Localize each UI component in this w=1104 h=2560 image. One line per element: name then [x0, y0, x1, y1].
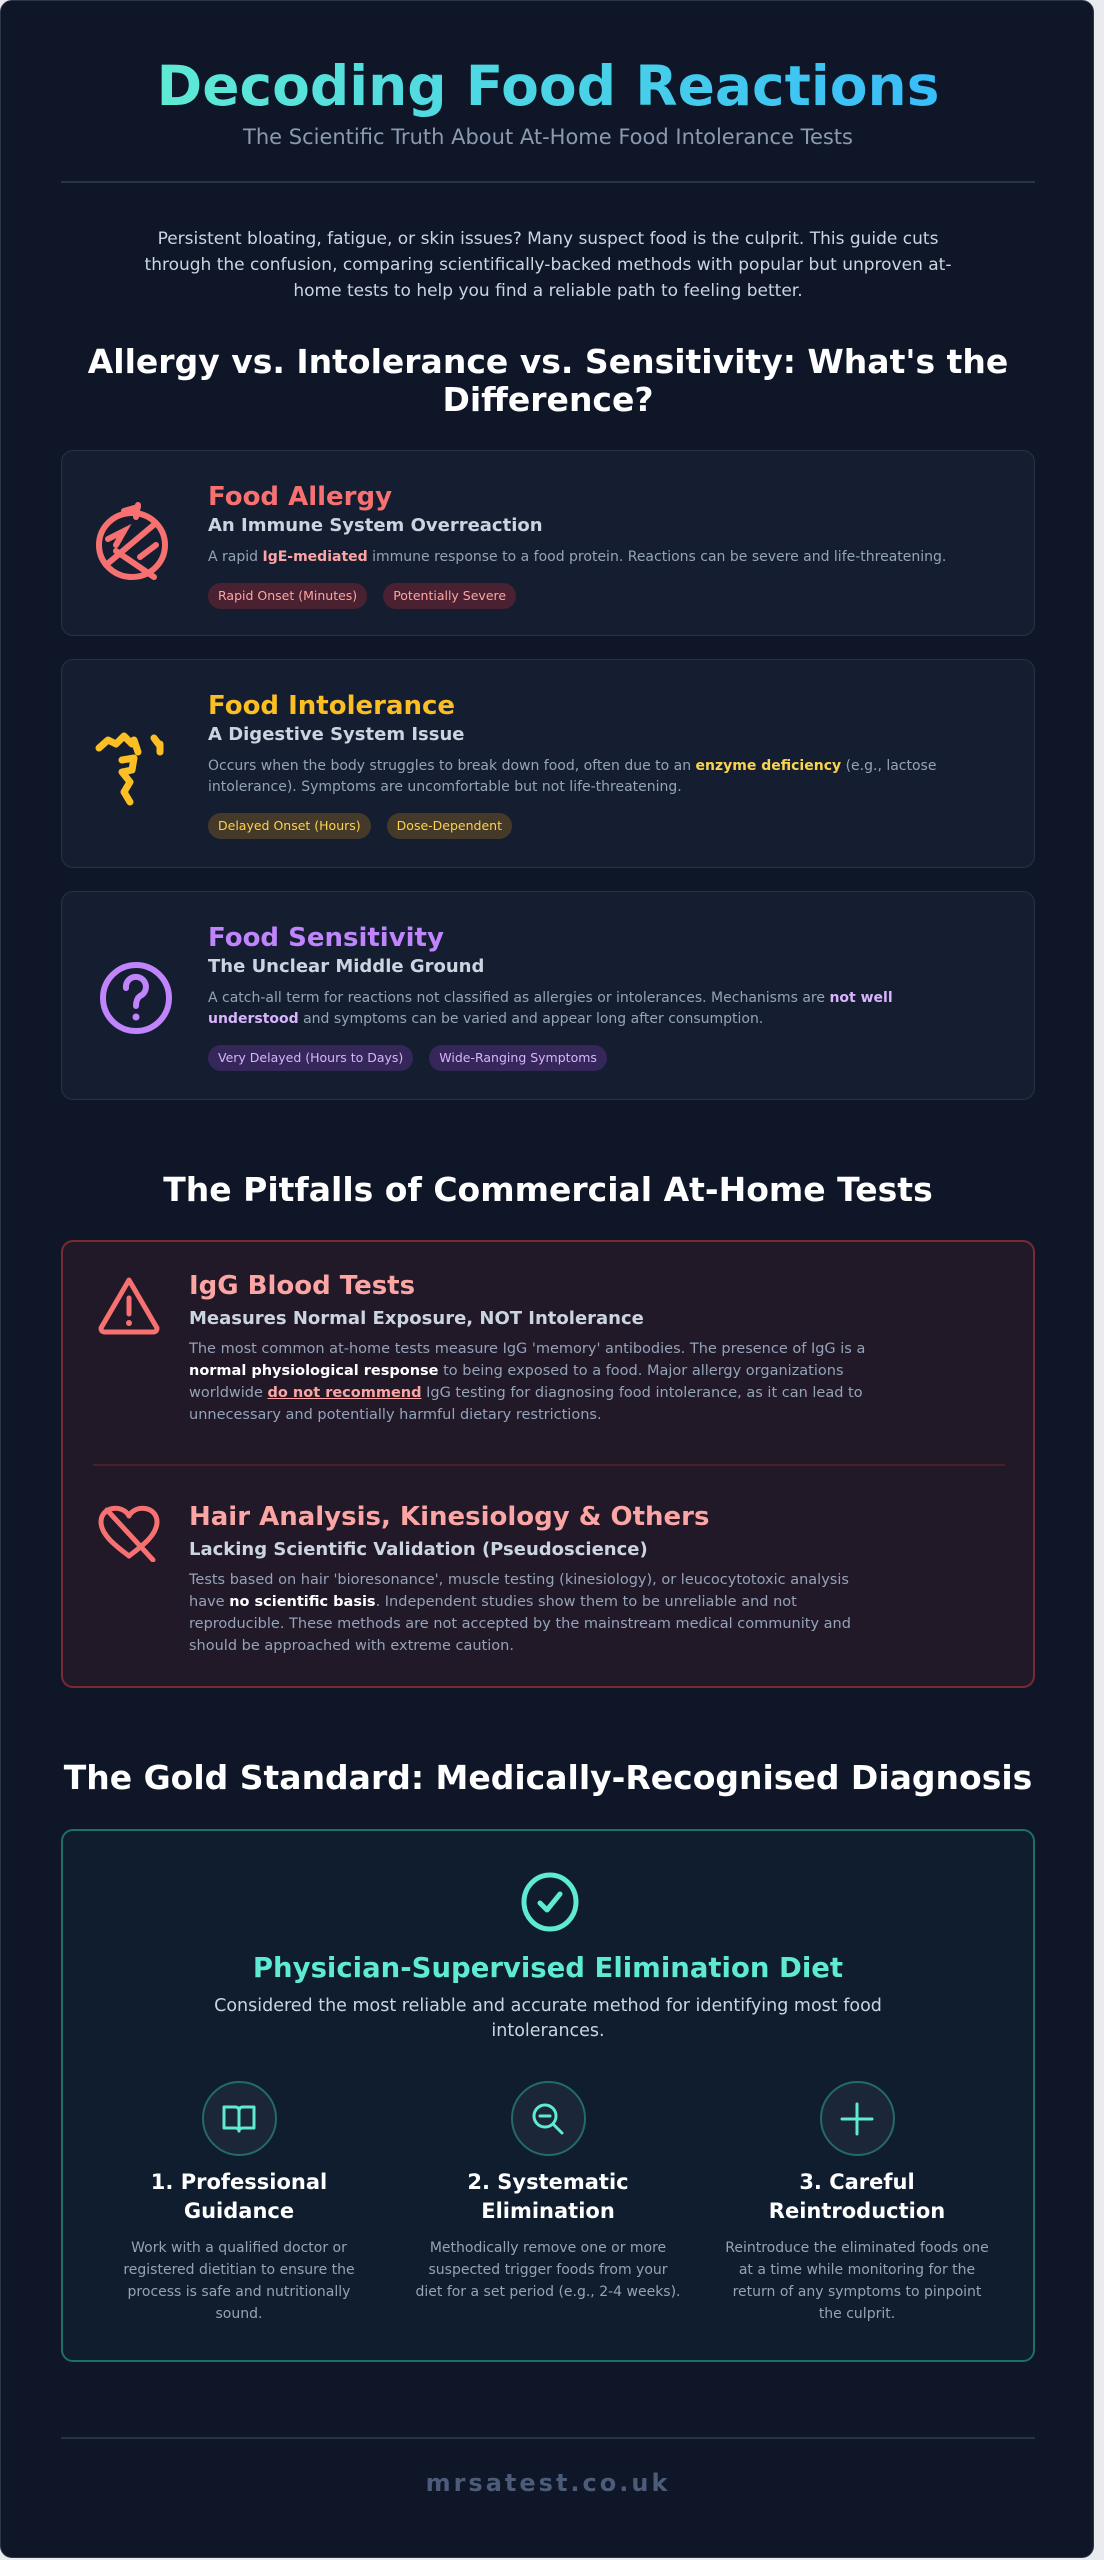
tags: Very Delayed (Hours to Days): [218, 1050, 403, 1065]
intro text: Persistent bloating, fatigue, or skin issues? Many suspect food is the culprit. This guide cuts through the confusion, comparing scientifically-backed methods with popular but unproven at-home tests to help you find a reliable path to feeling better.: [145, 229, 951, 301]
heading: allergy vs intolerance: Allergy vs. Intolerance vs. Sensitivity: What's the: [88, 342, 1008, 381]
item: hair analysis: [188, 1502, 851, 1654]
tags: Delayed Onset (Hours): [218, 818, 361, 833]
icon: check circle: [522, 1872, 578, 1932]
footer: mrsatest.co.uk: [426, 2469, 670, 2497]
step 3: [725, 2081, 989, 2322]
item: hair analysis: Hair Analysis, Kinesiology & Others: [189, 1502, 709, 1532]
panel: food intolerance: [61, 659, 1035, 868]
icon: plus: [820, 2081, 894, 2156]
item: IgG blood tests: IgG Blood Tests: [189, 1271, 415, 1301]
panel: food sensitivity: The Unclear Middle Ground: [208, 956, 484, 977]
step 3: Reintroduction: [769, 2199, 945, 2223]
step 2: [415, 2081, 681, 2300]
panel: food allergy: [61, 450, 1035, 636]
icon: magnifier minus: [510, 2081, 586, 2156]
heading: allergy vs intolerance: Difference?: [442, 380, 654, 419]
title: food intolerance: Food Intolerance: [208, 691, 455, 721]
step 1: Guidance: [184, 2199, 294, 2223]
tags: Wide-Ranging Symptoms: [439, 1050, 597, 1065]
step 1: 1. Professional: [151, 2170, 327, 2194]
item: IgG blood tests: Measures Normal Exposure, NOT Intolerance: [189, 1308, 644, 1329]
icon: broken heart: [98, 1506, 160, 1562]
title: food sensitivity: Food Sensitivity: [208, 923, 444, 953]
step 2: 2. Systematic: [467, 2170, 629, 2194]
tags: [208, 583, 516, 609]
panel: food allergy: An Immune System Overreaction: [208, 515, 543, 536]
icon: allergy: [96, 502, 168, 580]
icon: question: [100, 962, 172, 1034]
tags: Rapid Onset (Minutes): [218, 588, 357, 603]
step 1: Work with a qualified doctor or registered dietitian to ensure the process is safe and nutritionally sound.: [123, 2240, 355, 2322]
heading: pitfalls: The Pitfalls of Commercial At-Home Tests: [163, 1170, 933, 1209]
subtitle: elimination diet: Considered the most reliable and accurate method for identifying most food intolerances.: [214, 1996, 882, 2041]
item: hair analysis: Tests based on hair 'bioresonance', muscle testing (kinesiology), or leucocytotoxic analysis have no scientific basis. Independent studies show them to be unreliable and not reproducible. These methods are not accepted by the mainstream medical community and should be approached with extreme caution.: [189, 1572, 851, 1654]
subtitle: The Scientific Truth About At-Home Food Intolerance Tests: [243, 125, 853, 149]
tags: [208, 813, 512, 839]
tags: [208, 1045, 607, 1071]
step 2: diet for a set period (e.g., 2-4 weeks).: [415, 2284, 681, 2300]
icon: warning: [98, 1278, 160, 1334]
item: IgG blood tests: The most common at-home tests measure IgG 'memory' antibodies. The presence of IgG is a normal physiological response to being exposed to a food. Major allergy organizations worldwide do not recommend IgG testing for diagnosing food intolerance, as it can lead to unnecessary and potentially harmful dietary restrictions.: [189, 1341, 865, 1423]
tags: Dose-Dependent: [397, 818, 502, 833]
item: IgG blood tests: [188, 1271, 865, 1423]
heading: allergy vs intolerance: [88, 342, 1008, 419]
tags: Potentially Severe: [393, 588, 506, 603]
panel: gold standard: [61, 1829, 1035, 2362]
step 3: Reintroduce the eliminated foods one at a time while monitoring for the return of any symptoms to pinpoint the culprit.: [725, 2240, 989, 2322]
panel: food intolerance: A Digestive System Issue: [208, 724, 464, 745]
icon: book: [202, 2081, 276, 2156]
step 1: [123, 2081, 355, 2322]
panel: food sensitivity: A catch-all term for reactions not classified as allergies or intolerances. Mechanisms are not well understood and symptoms can be varied and appear long after consumption.: [208, 990, 893, 1027]
icon: intolerance: [96, 732, 164, 806]
panel: food allergy: A rapid IgE-mediated immune response to a food protein. Reactions can be severe and life-threatening.: [208, 549, 946, 565]
step 2: Elimination: [481, 2199, 615, 2223]
item: hair analysis: Lacking Scientific Validation (Pseudoscience): [189, 1539, 648, 1560]
heading: gold standard: The Gold Standard: Medically-Recognised Diagnosis: [64, 1758, 1032, 1797]
panel: food intolerance: Occurs when the body struggles to break down food, often due to an enzyme deficiency (e.g., lactose intolerance). Symptoms are uncomfortable but not life-threatening.: [208, 758, 936, 795]
panel: food sensitivity: [61, 891, 1035, 1100]
step 2: Methodically remove one or more suspected trigger foods from your: [428, 2240, 668, 2278]
title: elimination diet: Physician-Supervised Elimination Diet: [253, 1952, 843, 1984]
title: Decoding Food Reactions: [157, 54, 939, 118]
panel: pitfalls: [61, 1240, 1035, 1688]
step 3: 3. Careful: [799, 2170, 915, 2194]
title: food allergy: Food Allergy: [208, 482, 392, 512]
